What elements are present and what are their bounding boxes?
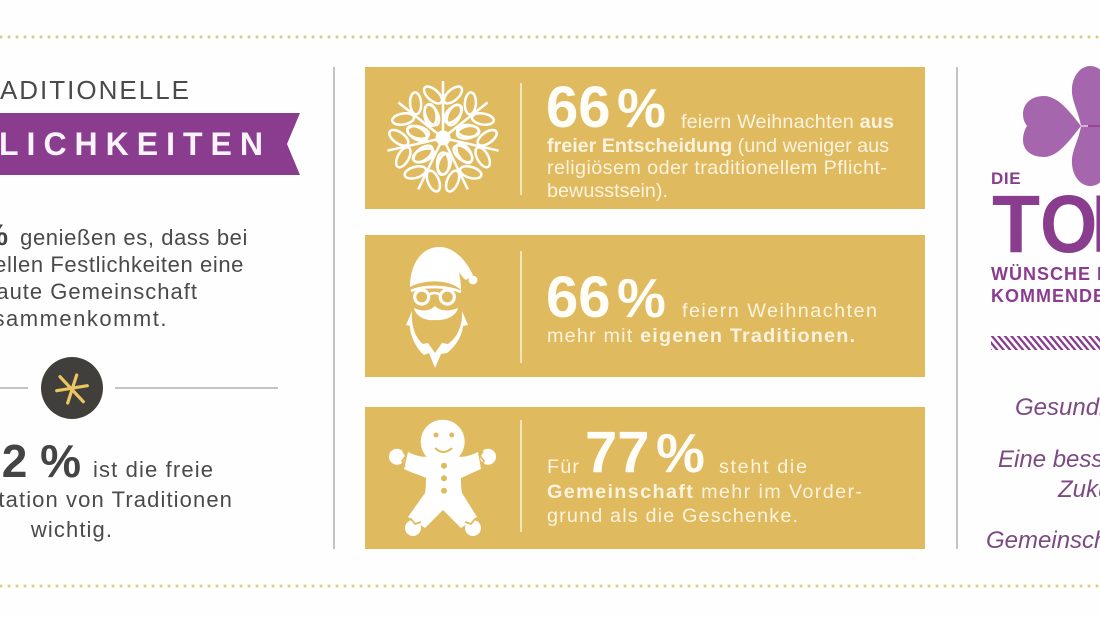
icon: santa with glasses: [406, 247, 477, 368]
text block: community: steht die: [719, 456, 807, 478]
text block: community: grund als die Geschenke.: [547, 505, 798, 527]
panel: community over gifts: [365, 407, 925, 549]
list: wishes: [986, 394, 1100, 554]
text block: free choice: bewusstsein).: [547, 180, 668, 202]
text block: free choice: feiern Weihnachten aus: [681, 111, 894, 133]
text block: free choice: [547, 111, 894, 202]
icon: four-leaf clover: [1023, 66, 1100, 186]
statistic: 66 percent: [546, 75, 666, 140]
statistic: 77 percent: %: [656, 422, 705, 484]
statistic: 77 percent: 77: [585, 420, 650, 485]
heading: die top: T: [992, 179, 1040, 270]
text block: free interpretation statistic: wichtig.: [30, 517, 113, 542]
striped divider: [991, 336, 1100, 350]
icon: snowflake: [383, 81, 503, 199]
banner: Festlichkeiten: [0, 113, 300, 175]
panel: traditional festivities: [0, 75, 300, 542]
text block: free choice: religiösem oder traditionellem Pflicht-: [547, 157, 887, 179]
text block: free choice: freier Entscheidung (und weniger aus: [547, 135, 889, 157]
statistic: 77 percent: [585, 420, 705, 485]
heading: die top: O: [1040, 177, 1097, 270]
text block: own traditions: [547, 300, 877, 347]
statistic: 66 percent: %: [617, 267, 666, 329]
divider with star icon: [0, 357, 278, 419]
text block: community: [547, 456, 862, 527]
text block: own traditions: feiern Weihnachten: [682, 300, 877, 322]
text block: free interpretation statistic: ist die freie: [93, 457, 213, 482]
statistic: 66 percent: %: [617, 77, 666, 139]
text block: community statistic: genießen es, dass bei: [20, 225, 248, 250]
statistic: 66 percent: [546, 265, 666, 330]
text block: community: Gemeinschaft mehr im Vorder-: [547, 481, 862, 503]
subheading: wishes: [991, 264, 1100, 306]
icon: gingerbread man: [389, 420, 496, 536]
statistic: 66 percent: 66: [546, 75, 611, 140]
text block: community: Für: [547, 456, 579, 478]
heading: die top: [991, 169, 1100, 270]
panel: own traditions: [365, 235, 925, 377]
text block: community statistic: [0, 219, 248, 331]
text block: free interpretation statistic: [0, 435, 233, 542]
statistic: 66 percent: 66: [546, 265, 611, 330]
heading: die top: DIE: [991, 169, 1021, 188]
panel: top wishes: [986, 66, 1100, 554]
panel: free choice: [365, 67, 925, 209]
text block: own traditions: mehr mit eigenen Traditionen.: [547, 325, 855, 347]
